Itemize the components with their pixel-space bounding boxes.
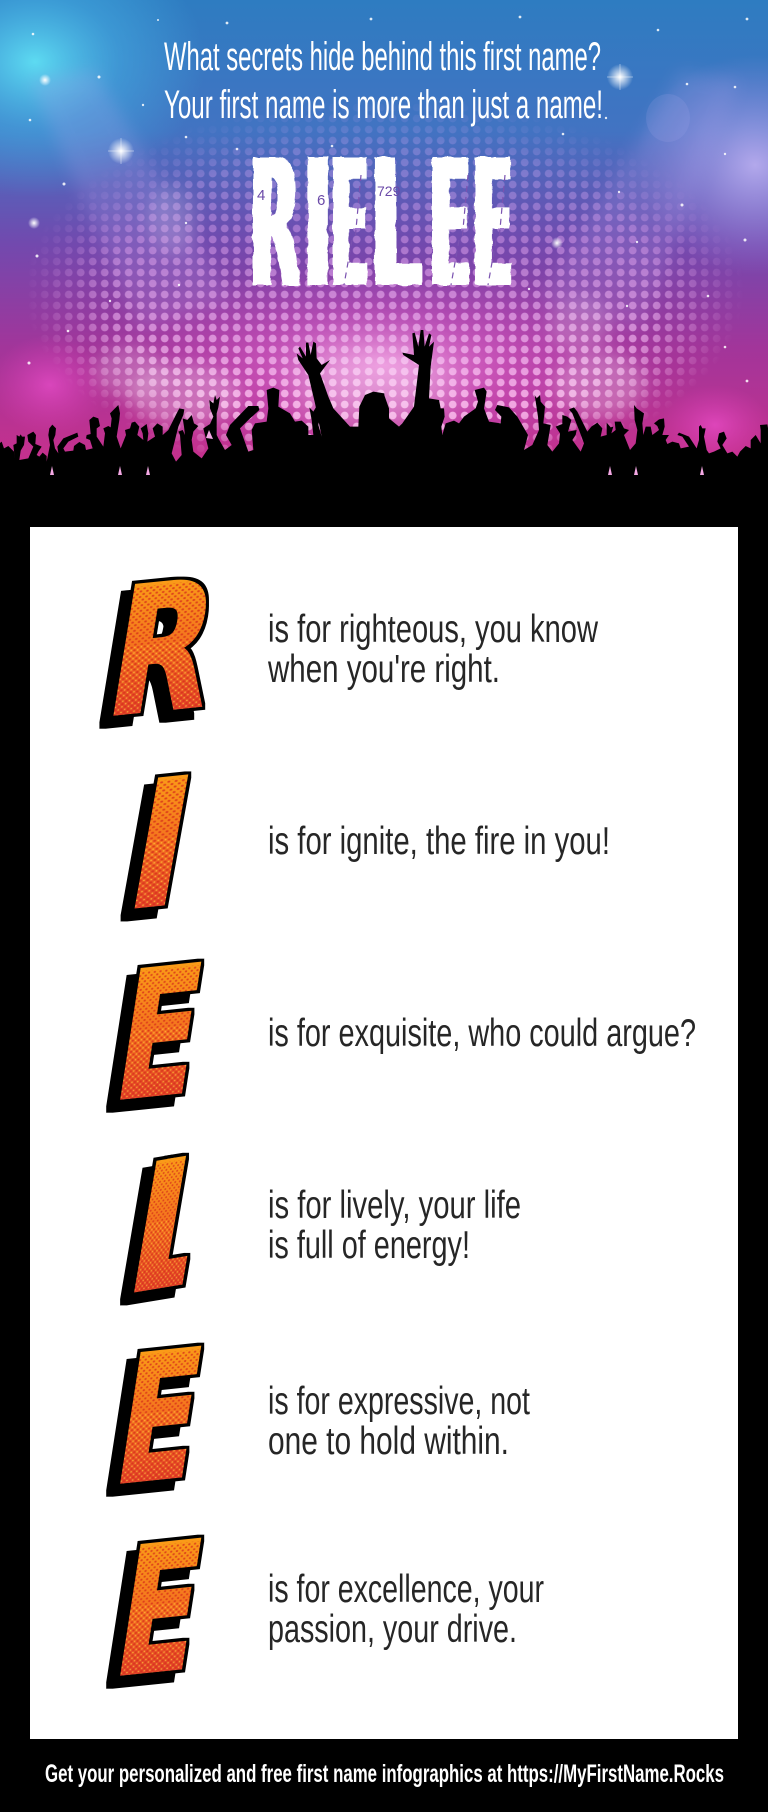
comic letter I: I: [115, 741, 206, 950]
comic letter L: L: [120, 1120, 212, 1334]
crowd silhouette: right half: [384, 330, 768, 480]
E description: [268, 1380, 530, 1463]
row: letter L: [120, 1120, 521, 1334]
L description: is full of energy!: [268, 1224, 470, 1267]
E description: [268, 1568, 544, 1651]
E description: one to hold within.: [268, 1420, 509, 1463]
name letters: R: [250, 121, 300, 331]
white panel background: [30, 527, 738, 1739]
name letters: L: [371, 120, 422, 331]
distressed marks on the name: 729: [377, 183, 401, 199]
R description: is for righteous, you know: [268, 608, 599, 651]
I description: is for ignite, the fire in you!: [268, 820, 610, 863]
E description: passion, your drive.: [268, 1608, 517, 1651]
distressed marks on the name: [257, 175, 505, 285]
name letters: I: [304, 120, 332, 330]
smoke clouds: [95, 94, 690, 425]
row: letter E, excellence: [104, 1505, 544, 1717]
E description: is for expressive, not: [268, 1380, 530, 1423]
hero: concert stage background: [0, 0, 768, 480]
L description: is for lively, your life: [268, 1184, 521, 1227]
L description: [268, 1184, 521, 1267]
row: letter I: [115, 741, 610, 950]
E description: is for excellence, your: [268, 1568, 544, 1611]
crowd silhouette: left half: [0, 342, 384, 480]
sparkles and stars: [28, 16, 748, 382]
sky gradient: [0, 0, 768, 470]
comic letter E: E: [104, 1505, 215, 1717]
distressed marks on the name: 4: [257, 187, 265, 204]
comic letter E: E: [104, 929, 215, 1141]
coloured stage lights: [0, 0, 768, 470]
comic letter E: E: [104, 1313, 215, 1525]
R description: [267, 608, 599, 691]
dot matrix wall: [41, 107, 732, 452]
R description: when you're right.: [267, 648, 500, 691]
gaps between crowd figures: [50, 430, 704, 475]
panel: letter meanings: [30, 527, 738, 1739]
comic letter R: R: [96, 542, 230, 757]
distressed marks on the name: 6: [317, 192, 325, 209]
name letters: E: [331, 119, 368, 330]
row: letter R: [96, 542, 599, 757]
row: letter E, expressive: [104, 1313, 530, 1525]
first name title: [250, 119, 512, 331]
name letters: E: [430, 119, 470, 330]
name letters: E: [473, 119, 512, 330]
row: letter E, exquisite: [104, 929, 696, 1141]
name letters: [250, 119, 512, 331]
